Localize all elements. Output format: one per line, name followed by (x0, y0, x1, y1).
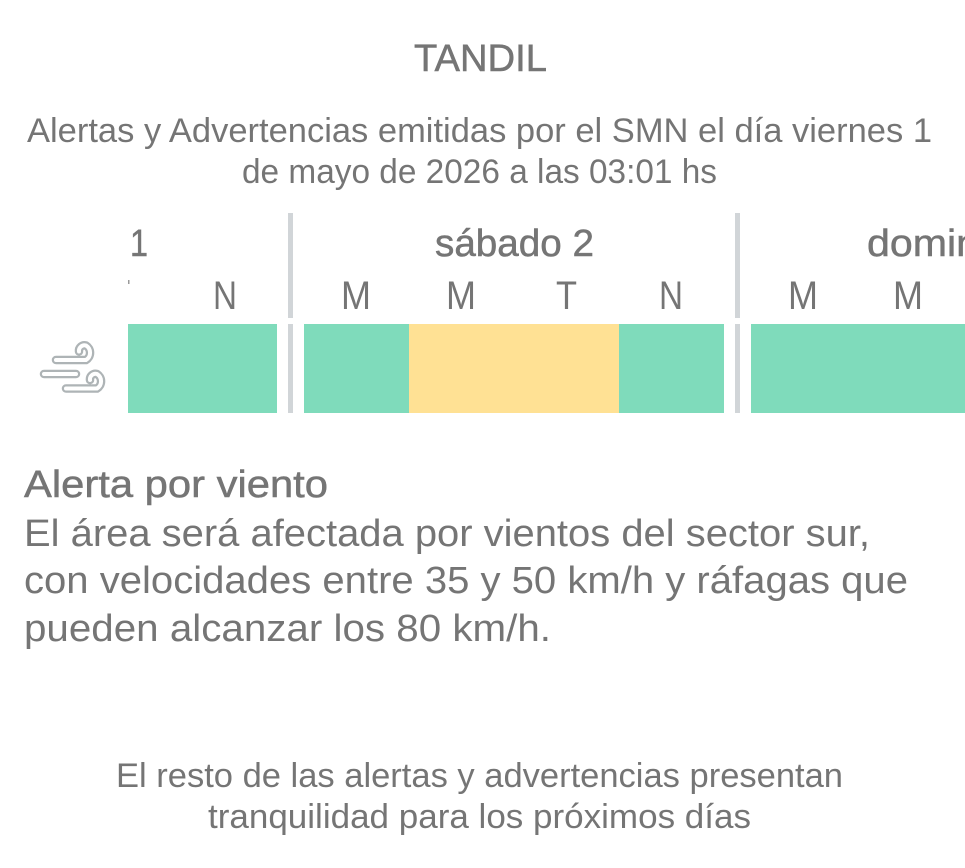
alert text block (24, 464, 908, 650)
day headers: sábado 2 (435, 223, 594, 265)
period labels: N (659, 274, 683, 318)
period labels: T (556, 274, 577, 318)
alert description: pueden alcanzar los 80 km/h. (24, 608, 551, 650)
wind alert bars (128, 324, 965, 413)
subtitle: issue date (27, 112, 932, 191)
period labels: M (446, 274, 476, 318)
clipped label remnant (128, 280, 130, 284)
day headers (130, 223, 965, 265)
footer note (116, 757, 843, 836)
subtitle: issue date: de mayo de 2026 a las 03:01 hs (242, 153, 717, 191)
footer note: tranquilidad para los próximos días (208, 798, 751, 836)
day headers: 1 (130, 223, 148, 265)
alert description (24, 513, 908, 650)
alert heading: Alerta por viento (24, 464, 328, 506)
alert description: El área será afectada por vientos del sector sur, (24, 513, 870, 555)
period labels: M (893, 274, 923, 318)
footer note: El resto de las alertas y advertencias presentan (116, 757, 843, 795)
period labels: M (341, 274, 371, 318)
subtitle: issue date: Alertas y Advertencias emitidas por el SMN el día viernes 1 (27, 112, 932, 150)
period labels: M (788, 274, 818, 318)
period labels: N (213, 274, 237, 318)
timeline chart (44, 213, 965, 413)
title: TANDIL (414, 38, 547, 80)
icon: wind (44, 345, 101, 388)
alert description: con velocidades entre 35 y 50 km/h y ráfagas que (24, 560, 908, 602)
day separators (288, 213, 740, 413)
period labels (213, 274, 923, 318)
